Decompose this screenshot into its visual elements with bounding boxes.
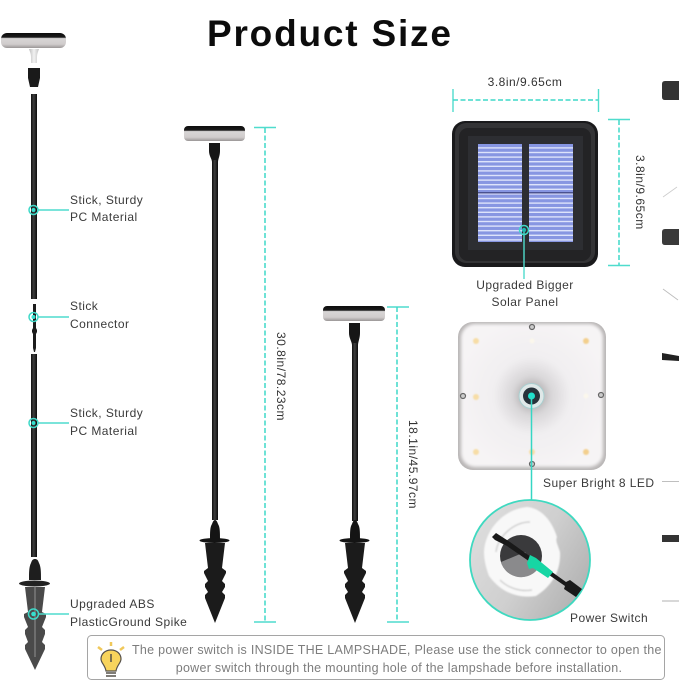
callout: solar panel: Solar Panel — [492, 295, 558, 309]
callout: stick material 2 — [29, 406, 143, 438]
callout: stick connector: Stick — [70, 299, 99, 313]
label: power switch: Power Switch — [570, 611, 648, 625]
callout: solar panel: Upgraded Bigger — [476, 278, 574, 292]
short assembled lamp — [323, 306, 385, 623]
solar cells — [478, 144, 573, 242]
label: super bright LED: Super Bright 8 LED — [543, 476, 654, 490]
callout: ground spike: Upgraded ABS — [70, 597, 155, 611]
callout: solar panel — [476, 226, 574, 309]
lamp head, disassembled — [1, 33, 66, 87]
power switch stick — [492, 533, 582, 597]
mounting hole — [519, 384, 544, 408]
power switch magnified circle — [470, 500, 590, 620]
connector line to power switch — [530, 396, 532, 500]
callout: ground spike: PlasticGround Spike — [70, 615, 187, 629]
callout: stick material 1 — [29, 193, 143, 224]
upper stick — [31, 94, 37, 299]
ground spike — [19, 559, 50, 670]
height dimension: solar panel: 3.8in/9.65cm — [633, 155, 647, 230]
width dimension: solar panel: 3.8in/9.65cm — [488, 75, 562, 89]
cropped neighbouring image fragments at right edge — [662, 81, 679, 601]
stick connector — [32, 304, 37, 352]
callout: stick material 2: Stick, Sturdy — [70, 406, 143, 420]
height dimension: 18.1in: 18.1in/45.97cm — [406, 420, 420, 509]
callout: stick material 2: PC Material — [70, 424, 138, 438]
lampshade underside with LEDs — [458, 322, 606, 470]
screws — [460, 324, 604, 466]
note box — [88, 636, 664, 680]
exploded lamp with parts — [1, 33, 187, 670]
icon: light bulb — [98, 642, 124, 676]
callout: stick material 1: PC Material — [70, 210, 138, 224]
height dimension: 30.8in: 30.8in/78.23cm — [274, 332, 288, 421]
callout: stick material 1: Stick, Sturdy — [70, 193, 143, 207]
callout: stick connector: Connector — [70, 317, 129, 331]
LEDs — [473, 338, 589, 455]
tall assembled lamp — [184, 126, 245, 623]
title: Product Size — [207, 13, 453, 54]
callout: ground spike — [28, 597, 187, 629]
callout: stick connector — [29, 299, 129, 331]
white lampshade rings — [484, 507, 560, 597]
note box: power switch through the mounting hole of the lampshade before installation. — [176, 661, 622, 675]
lower stick — [31, 354, 37, 557]
solar panel — [452, 121, 598, 267]
note text: The power switch is INSIDE THE LAMPSHADE, Please use the stick connector to open the — [132, 643, 662, 657]
